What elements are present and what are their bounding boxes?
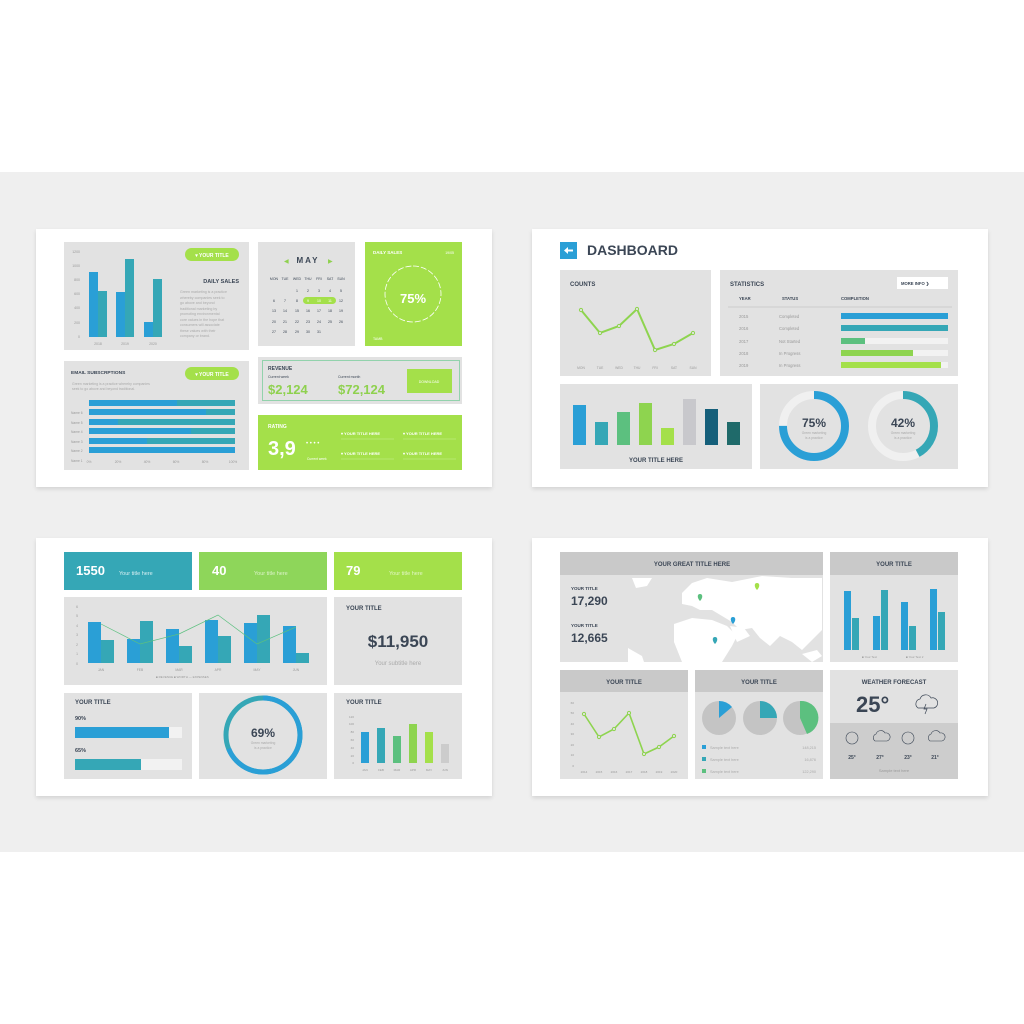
- panel: weather forecast: 27°: [876, 755, 884, 761]
- panel: email subscriptions: [64, 361, 249, 470]
- panel: line chart: 30: [571, 732, 574, 736]
- panel: revenue: Current week: [268, 375, 289, 379]
- panel: counts line chart: SUN: [690, 366, 697, 370]
- panel: world map: YOUR TITLE: [571, 586, 598, 591]
- panel: calendar: 17: [317, 309, 321, 313]
- panel: daily sales 75%: 75%: [400, 291, 426, 306]
- panel: bar chart: 80: [351, 730, 354, 734]
- panel: calendar: 20: [272, 320, 276, 324]
- panel: email subscriptions: 20%: [115, 460, 121, 464]
- panel: bar chart: 120: [349, 715, 354, 719]
- panel: statistics table: In Progress: [779, 363, 800, 368]
- panel: email subscriptions: Name 1: [71, 459, 83, 463]
- panel: calendar: 30: [306, 330, 310, 334]
- panel: statistics table: 2015: [739, 314, 749, 319]
- panel: statistics table: COMPLETION: [841, 296, 869, 301]
- panel: calendar: 8: [296, 299, 298, 303]
- panel: combo bar line chart: MAR: [175, 668, 183, 672]
- panel: email subscriptions: Name 5: [71, 421, 83, 425]
- panel: calendar: 27: [272, 330, 276, 334]
- panel: calendar: 1: [296, 289, 298, 293]
- panel: calendar: 5: [340, 289, 342, 293]
- panel: calendar: 3: [318, 289, 320, 293]
- panel: line chart: 2019: [656, 770, 663, 774]
- panel: calendar: FRI: [316, 277, 322, 281]
- panel: line chart: 2020: [671, 770, 678, 774]
- panel: daily sales bar chart: 400: [74, 306, 80, 310]
- panel: revenue: [258, 357, 462, 404]
- panel: email subscriptions: seek to go above and beyond traditional.: [72, 387, 135, 391]
- panel: pie charts: 148,215: [802, 746, 816, 750]
- panel: calendar: 13: [272, 309, 276, 313]
- panel: counts line chart: WED: [615, 366, 623, 370]
- panel: rating: Current week: [307, 457, 327, 461]
- panel: bar chart: JUN: [442, 768, 448, 772]
- pill: your title: [185, 248, 239, 261]
- panel: rating: [258, 415, 462, 470]
- panel: donut charts: [760, 384, 958, 469]
- panel: counts line chart: SAT: [671, 366, 677, 370]
- panel: bar chart: APR: [410, 768, 417, 772]
- panel: calendar: 23: [306, 320, 310, 324]
- slide: dashboard (top-right): [532, 229, 988, 487]
- kpi tiles: 40: [212, 563, 226, 578]
- slide: sales dashboard (top-left): [36, 229, 492, 487]
- panel: paired bar chart: ■ Your Text: [862, 655, 877, 659]
- panel: revenue: Current month: [338, 375, 360, 379]
- panel: world map: 12,665: [571, 631, 608, 645]
- panel: statistics table: In Progress: [779, 351, 800, 356]
- panel: statistics table: MORE INFO ❯: [901, 281, 929, 287]
- panel: pie charts: Sample text here: [710, 770, 739, 774]
- panel: combo bar line chart: 5: [76, 614, 78, 618]
- panel: calendar: THU: [304, 277, 312, 281]
- panel: bar chart: MAR: [394, 768, 401, 772]
- panel: daily sales bar chart: these values with their: [180, 329, 216, 333]
- kpi tiles: 1550: [76, 563, 105, 578]
- panel: daily sales bar chart: 1000: [72, 264, 80, 268]
- panel: revenue: $72,124: [338, 382, 386, 397]
- panel: weather forecast: WEATHER FORECAST: [862, 680, 927, 686]
- panel: statistics table: Completed: [779, 326, 800, 331]
- panel: bar chart: 60: [351, 738, 354, 742]
- panel: calendar: 28: [283, 330, 287, 334]
- panel: daily sales 75%: DAILY SALES: [373, 250, 402, 255]
- panel: calendar: 10: [317, 299, 321, 303]
- panel: statistics table: 2016: [739, 326, 749, 331]
- panel: daily sales bar chart: 0: [78, 335, 80, 339]
- panel: progress bars: YOUR TITLE: [75, 700, 111, 706]
- panel: statistics table: [720, 270, 958, 376]
- panel: big number: [334, 597, 462, 685]
- panel: calendar: 7: [284, 299, 286, 303]
- panel: calendar: 4: [329, 289, 331, 293]
- panel: email subscriptions: 0%: [87, 460, 91, 464]
- panel: calendar: 24: [317, 320, 321, 324]
- panel: line chart: [560, 670, 688, 779]
- panel: combo bar line chart: 2: [76, 643, 78, 647]
- slide: map and weather (bottom-right): [532, 538, 988, 796]
- panel: daily sales 75%: [365, 242, 462, 346]
- panel: daily sales bar chart: DAILY SALES: [203, 279, 239, 285]
- panel: line chart: 50: [571, 711, 574, 715]
- panel: line chart: 2016: [611, 770, 618, 774]
- panel: calendar: 15: [295, 309, 299, 313]
- panel: rating: ▾ YOUR TITLE HERE: [402, 451, 442, 456]
- panel: donut 69%: [199, 693, 327, 779]
- kpi tiles: 79: [346, 563, 360, 578]
- panel: combo bar line chart: 4: [76, 624, 78, 628]
- panel: donut charts: is a practice: [894, 436, 912, 440]
- panel: paired bar chart: [830, 552, 958, 662]
- panel: email subscriptions: Green marketing is a practice whereby companies: [72, 382, 150, 386]
- panel: combo bar line chart: 0: [76, 662, 78, 666]
- panel: combo bar line chart: FEB: [137, 668, 144, 672]
- panel: daily sales bar chart: 600: [74, 292, 80, 296]
- panel: donut 69%: 69%: [251, 726, 275, 740]
- panel: donut charts: 42%: [891, 416, 915, 430]
- panel: daily sales bar chart: 200: [74, 321, 80, 325]
- panel: daily sales bar chart: [64, 242, 249, 350]
- kpi tiles: Your title here: [389, 571, 423, 577]
- panel: big number: $11,950: [368, 632, 428, 651]
- panel: big number: Your subtitle here: [375, 661, 422, 667]
- panel: pie charts: Sample text here: [710, 758, 739, 762]
- panel: weather forecast: [830, 670, 958, 779]
- kpi tiles: Your title here: [119, 571, 153, 577]
- panel: calendar: ▶: [328, 259, 333, 265]
- panel: daily sales bar chart: Green marketing is a practice: [180, 290, 227, 294]
- panel: counts line chart: TUE: [597, 366, 604, 370]
- panel: donut 69%: is a practice: [254, 746, 272, 750]
- panel: counts line chart: MON: [577, 366, 585, 370]
- panel: daily sales 75%: 19/05: [445, 251, 454, 255]
- panel: pie charts: YOUR TITLE: [741, 680, 777, 686]
- panel: email subscriptions: Name 4: [71, 430, 83, 434]
- panel: daily sales bar chart: 2018: [94, 342, 102, 346]
- panel: daily sales bar chart: consumers will associate: [180, 323, 220, 327]
- panel: combo bar line chart: ■ REVENUE ■ WORTH — EXPENSES: [156, 675, 209, 679]
- panel: daily sales bar chart: whereby companies seek to: [180, 296, 225, 300]
- panel: combo bar line chart: JUN: [293, 668, 300, 672]
- panel: calendar: 6: [273, 299, 275, 303]
- panel: calendar: 16: [306, 309, 310, 313]
- panel: line chart: 2018: [641, 770, 648, 774]
- panel: statistics table: Not Started: [779, 339, 801, 344]
- panel: statistics table: 2017: [739, 339, 749, 344]
- kpi tiles: Your title here: [254, 571, 288, 577]
- panel: daily sales 75%: TAMB: [373, 337, 383, 341]
- kpi tiles: [64, 552, 462, 590]
- panel: world map: 17,290: [571, 594, 608, 608]
- panel: rating: 3,9: [268, 438, 296, 460]
- panel: email subscriptions: 40%: [144, 460, 150, 464]
- panel: daily sales bar chart: 2020: [149, 342, 157, 346]
- panel: counts line chart: THU: [634, 366, 641, 370]
- panel: line chart: 10: [571, 753, 574, 757]
- panel: paired bar chart: YOUR TITLE: [876, 562, 912, 568]
- panel: combo bar line chart: 1: [76, 652, 78, 656]
- panel: combo bar line chart: 6: [76, 605, 78, 609]
- panel: calendar: SUN: [337, 277, 345, 281]
- panel: calendar: MAY: [296, 256, 320, 265]
- panel: donut charts: Green marketing: [802, 431, 826, 435]
- panel: calendar: TUE: [282, 277, 289, 281]
- panel: statistics table: YEAR: [739, 296, 751, 301]
- panel: bar chart: 40: [351, 746, 354, 750]
- panel: email subscriptions: Name 2: [71, 449, 83, 453]
- panel: revenue: DOWNLOAD: [419, 380, 440, 384]
- panel: email subscriptions: 60%: [173, 460, 179, 464]
- panel: progress bars: 90%: [75, 716, 86, 722]
- panel: calendar: 9: [307, 299, 309, 303]
- panel: bar chart your title here: YOUR TITLE HERE: [629, 458, 683, 464]
- panel: calendar: 2: [307, 289, 309, 293]
- panel: daily sales bar chart: company or brand.: [180, 334, 210, 338]
- panel: progress bars: 65%: [75, 748, 86, 754]
- panel: statistics table: STATUS: [782, 296, 798, 301]
- panel: calendar: 22: [295, 320, 299, 324]
- panel: combo bar line chart: MAY: [254, 668, 261, 672]
- heading: dashboard: DASHBOARD: [587, 242, 678, 258]
- panel: email subscriptions: EMAIL SUBSCRPTIONS: [71, 370, 126, 376]
- panel: world map: YOUR GREAT TITLE HERE: [654, 562, 730, 568]
- panel: combo bar line chart: APR: [215, 668, 222, 672]
- panel: counts line chart: COUNTS: [570, 282, 595, 288]
- panel: line chart: 2014: [581, 770, 588, 774]
- panel: calendar: 31: [317, 330, 321, 334]
- panel: daily sales bar chart: go above and beyond: [180, 301, 215, 305]
- panel: line chart: 2017: [626, 770, 633, 774]
- panel: weather forecast: 23°: [904, 755, 912, 761]
- panel: daily sales bar chart: 800: [74, 278, 80, 282]
- panel: daily sales bar chart: promoting environmental: [180, 312, 220, 316]
- panel: calendar: 14: [283, 309, 287, 313]
- panel: revenue: $2,124: [268, 382, 309, 397]
- panel: pie charts: 16,876: [804, 758, 816, 762]
- panel: combo bar line chart: [64, 597, 327, 685]
- panel: calendar: 19: [339, 309, 343, 313]
- panel: statistics table: 2019: [739, 363, 749, 368]
- panel: statistics table: Completed: [779, 314, 800, 319]
- panel: line chart: 20: [571, 743, 574, 747]
- panel: weather forecast: Sample text here: [879, 768, 910, 773]
- panel: weather forecast: 25°: [856, 692, 889, 717]
- panel: big number: YOUR TITLE: [346, 606, 382, 612]
- panel: bar chart: 100: [349, 722, 354, 726]
- panel: rating: ▾ YOUR TITLE HERE: [402, 431, 442, 436]
- panel: progress bars: [64, 693, 192, 779]
- panel: line chart: 2015: [596, 770, 603, 774]
- panel: combo bar line chart: 3: [76, 633, 78, 637]
- panel: donut 69%: Green marketing: [251, 741, 275, 745]
- panel: calendar: [258, 242, 355, 346]
- panel: calendar: 29: [295, 330, 299, 334]
- panel: daily sales bar chart: core values in the hope that: [180, 318, 224, 322]
- panel: calendar: 25: [328, 320, 332, 324]
- panel: email subscriptions: Name 6: [71, 411, 83, 415]
- panel: donut charts: is a practice: [805, 436, 823, 440]
- panel: revenue: REVENUE: [268, 366, 293, 372]
- panel: rating: • • • •: [306, 441, 319, 447]
- panel: rating: ▾ YOUR TITLE HERE: [340, 431, 380, 436]
- panel: bar chart: [334, 693, 462, 779]
- panel: donut charts: Green marketing: [891, 431, 915, 435]
- panel: calendar: 11: [328, 299, 332, 303]
- panel: pie charts: 122,290: [802, 770, 816, 774]
- panel: calendar: WED: [293, 277, 302, 281]
- panel: calendar: MON: [270, 277, 279, 281]
- panel: calendar: ◀: [284, 259, 289, 265]
- panel: line chart: YOUR TITLE: [606, 680, 642, 686]
- panel: pie charts: Sample text here: [710, 746, 739, 750]
- icon: back arrow: [560, 242, 577, 259]
- panel: calendar: 26: [339, 320, 343, 324]
- panel: email subscriptions: Name 3: [71, 440, 83, 444]
- panel: bar chart your title here: [560, 384, 752, 469]
- panel: calendar: 21: [283, 320, 287, 324]
- slide: kpi dashboard (bottom-left): [36, 538, 492, 796]
- panel: bar chart: 20: [351, 754, 354, 758]
- panel: calendar: SAT: [327, 277, 334, 281]
- panel: bar chart: JAN: [362, 768, 368, 772]
- panel: world map: YOUR TITLE: [571, 623, 598, 628]
- panel: bar chart: MAY: [426, 768, 432, 772]
- panel: daily sales bar chart: 2019: [121, 342, 129, 346]
- panel: daily sales bar chart: 1200: [72, 250, 80, 254]
- panel: bar chart: FEB: [378, 768, 384, 772]
- panel: statistics table: STATISTICS: [730, 282, 764, 288]
- panel: daily sales bar chart: traditional marketing by: [180, 307, 217, 311]
- panel: world map: [560, 552, 823, 662]
- panel: email subscriptions: 80%: [202, 460, 208, 464]
- panel: counts line chart: [560, 270, 711, 376]
- panel: pie charts: [695, 670, 823, 779]
- panel: line chart: 40: [571, 722, 574, 726]
- panel: combo bar line chart: JAN: [98, 668, 105, 672]
- panel: rating: ▾ YOUR TITLE HERE: [340, 451, 380, 456]
- panel: calendar: 12: [339, 299, 343, 303]
- panel: rating: RATING: [268, 424, 287, 430]
- panel: line chart: 0: [572, 764, 574, 768]
- panel: weather forecast: 21°: [931, 755, 939, 761]
- panel: line chart: 60: [571, 701, 574, 705]
- panel: calendar: 18: [328, 309, 332, 313]
- panel: bar chart: 0: [352, 761, 354, 765]
- panel: email subscriptions: 100%: [229, 460, 237, 464]
- panel: email subscriptions: ▾ YOUR TITLE: [194, 372, 229, 378]
- panel: weather forecast: 25°: [848, 755, 856, 761]
- panel: counts line chart: FRI: [652, 366, 658, 370]
- panel: donut charts: 75%: [802, 416, 826, 430]
- panel: statistics table: 2018: [739, 351, 749, 356]
- panel: paired bar chart: ■ Your Text 2: [906, 655, 924, 659]
- panel: bar chart: YOUR TITLE: [346, 700, 382, 706]
- pill: your title: ▾ YOUR TITLE: [194, 253, 229, 259]
